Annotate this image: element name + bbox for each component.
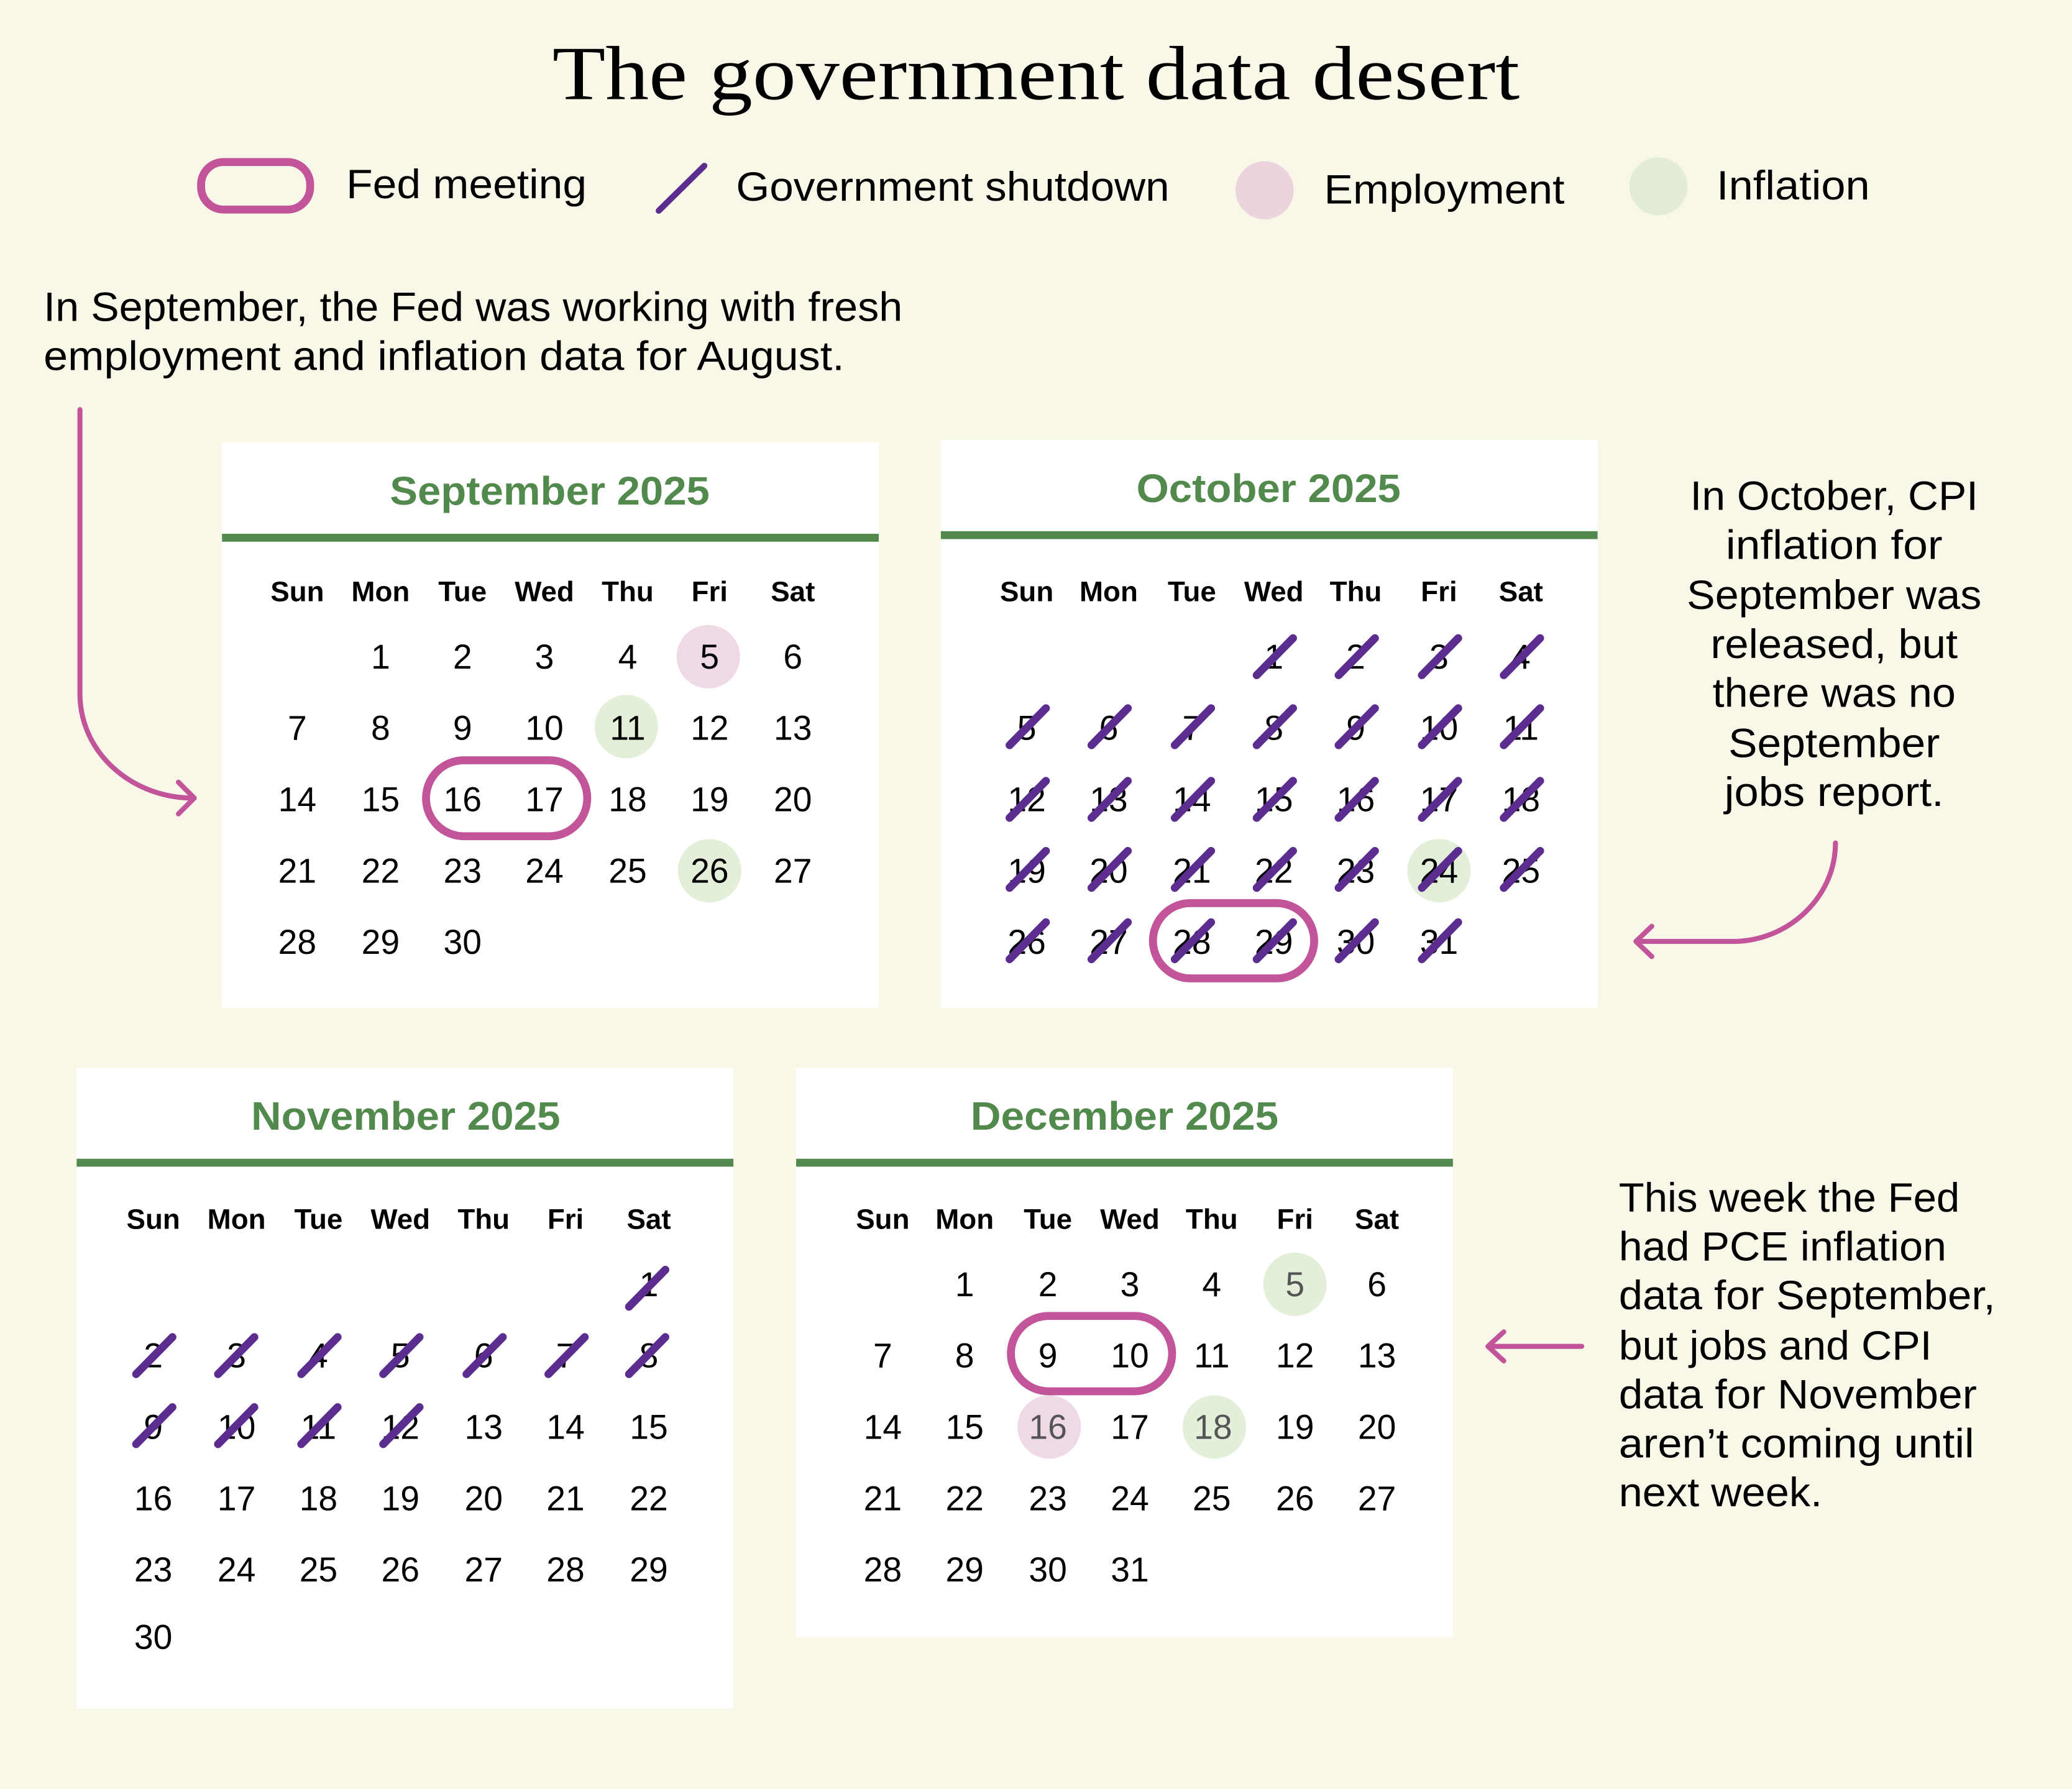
heading: December 2025: December 2025 (971, 1094, 1278, 1138)
dates: 4 (309, 1337, 328, 1375)
dates: 18 (1502, 780, 1540, 819)
dates: 27 (1089, 923, 1128, 961)
dates: 20 (1089, 851, 1128, 890)
weekday header: Fri (548, 1203, 584, 1235)
dates: 8 (371, 709, 390, 748)
dates: 24 (525, 851, 564, 890)
dates: 4 (1202, 1265, 1221, 1304)
dates: 6 (1099, 709, 1118, 748)
dates: 13 (1358, 1337, 1396, 1375)
text: September note: employment and inflation data for August. (44, 332, 845, 378)
dates: 21 (864, 1479, 902, 1517)
weekday header (1000, 575, 1543, 607)
dates: 17 (1111, 1408, 1149, 1447)
dates: 5 (1017, 709, 1036, 748)
dates: 19 (1007, 851, 1046, 890)
weekday header: Thu (1186, 1203, 1238, 1235)
text: October note: released, but (1710, 621, 1958, 667)
legend: Fed meeting: Fed meeting (346, 161, 587, 207)
dates: 30 (134, 1618, 172, 1657)
text: December note: This week the Fed (1619, 1174, 1960, 1220)
dates: 18 (608, 780, 647, 819)
dates: 1 (955, 1265, 974, 1304)
weekday header (856, 1203, 1399, 1235)
arrow: October note to October calendar (1636, 843, 1835, 956)
dates: 11 (301, 1408, 336, 1447)
arrow: December note to December calendar (1488, 1332, 1582, 1361)
weekday header: Sun (856, 1203, 910, 1235)
dates: 6 (1367, 1265, 1387, 1304)
weekday header: Tue (1024, 1203, 1072, 1235)
text: September note (44, 284, 902, 378)
dates: 29 (630, 1550, 668, 1589)
dates: 5 (391, 1337, 410, 1375)
text: December note: aren’t coming until (1619, 1420, 1974, 1466)
weekday header: Wed (515, 575, 574, 607)
weekday header: Sat (626, 1203, 671, 1235)
dates: 9 (1038, 1337, 1058, 1375)
weekday header: Mon (208, 1203, 266, 1235)
weekday header: Tue (294, 1203, 342, 1235)
weekday header: Mon (935, 1203, 994, 1235)
dates: 6 (783, 638, 802, 676)
Fed meeting ring: Dec 9-10 (1011, 1316, 1172, 1391)
panel: December 2025 calendar (796, 1068, 1453, 1637)
dates: 25 (1193, 1479, 1231, 1517)
panel: October 2025 calendar (941, 440, 1598, 1008)
dates: 14 (546, 1408, 585, 1447)
weekday header: Sat (1355, 1203, 1399, 1235)
heading: October 2025: October 2025 (1137, 466, 1401, 511)
weekday header: Sun (126, 1203, 180, 1235)
weekday header: Sat (771, 575, 815, 607)
dates: 12 (1276, 1337, 1314, 1375)
dates: 22 (1255, 851, 1293, 890)
dates: 20 (1358, 1408, 1396, 1447)
dates: 24 (1111, 1479, 1149, 1517)
weekday header: Wed (370, 1203, 430, 1235)
legend: Inflation (1630, 157, 1870, 216)
text: December note: had PCE inflation (1619, 1223, 1946, 1269)
dates: 17 (525, 780, 564, 819)
dates: 24 (1420, 851, 1458, 890)
inflation marker: Dec 5 (1263, 1253, 1327, 1316)
dates: 23 (443, 851, 482, 890)
dates: 24 (218, 1550, 255, 1589)
dates: 7 (1183, 709, 1201, 748)
legend: Fed meeting (201, 161, 587, 209)
dates: 22 (630, 1479, 668, 1517)
dates: 10 (218, 1408, 255, 1447)
dates: 27 (1358, 1479, 1396, 1517)
dates: 8 (1264, 709, 1283, 748)
dates (134, 1265, 668, 1657)
dates: 16 (1029, 1408, 1067, 1447)
dates: 10 (1111, 1337, 1149, 1375)
dates: 5 (1285, 1265, 1304, 1304)
dates: 16 (134, 1479, 172, 1517)
weekday header: Thu (457, 1203, 510, 1235)
dates: 28 (278, 923, 316, 961)
dates (1007, 638, 1540, 961)
legend: Inflation: Inflation (1717, 162, 1870, 208)
employment marker: Sep 5 (677, 625, 740, 689)
dates: 19 (382, 1479, 419, 1517)
dates: 1 (1264, 638, 1283, 676)
text: December note: next week. (1619, 1469, 1822, 1515)
dates: 16 (443, 780, 482, 819)
text: October note (1687, 473, 1981, 815)
dates: 1 (639, 1265, 658, 1304)
text: September note: In September, the Fed was working with fresh (44, 284, 902, 330)
legend (201, 157, 1870, 219)
weekday header: Mon (351, 575, 410, 607)
Fed meeting ring: Sep 16-17 (426, 760, 587, 836)
employment marker: Dec 16 (1017, 1395, 1081, 1458)
panel: November 2025 calendar (76, 1068, 733, 1708)
weekday header: Sun (1000, 575, 1053, 607)
dates: 9 (1346, 709, 1365, 748)
dates: 28 (1173, 923, 1211, 961)
weekday header: Wed (1100, 1203, 1160, 1235)
dates: 15 (1255, 780, 1293, 819)
dates: 27 (464, 1550, 503, 1589)
dates: 10 (1420, 709, 1458, 748)
dates: 27 (774, 851, 812, 890)
dates: 29 (945, 1550, 984, 1589)
dates: 15 (362, 780, 400, 819)
text: October note: inflation for (1726, 521, 1943, 567)
dates: 18 (300, 1479, 337, 1517)
heading: November 2025: November 2025 (251, 1094, 561, 1138)
dates: 2 (1346, 638, 1365, 676)
dates: 21 (546, 1479, 585, 1517)
dates: 14 (278, 780, 316, 819)
dates: 28 (546, 1550, 585, 1589)
legend: Employment (1235, 161, 1565, 219)
dates: 13 (1089, 780, 1128, 819)
dates: 23 (134, 1550, 172, 1589)
weekday header: Fri (692, 575, 728, 607)
dates: 2 (144, 1337, 163, 1375)
dates: 4 (1511, 638, 1531, 676)
shutdown slashes: Nov 1-12 (136, 1270, 666, 1444)
dates: 26 (382, 1550, 419, 1589)
dates: 18 (1194, 1408, 1232, 1447)
dates: 23 (1337, 851, 1375, 890)
dates: 14 (1173, 780, 1211, 819)
Fed meeting ring: Oct 28-29 (1153, 903, 1314, 979)
shutdown slashes: Oct 1-31 (1009, 638, 1540, 959)
weekday header (126, 1203, 671, 1235)
arrow: September note to September calendar (80, 410, 195, 814)
dates: 29 (362, 923, 400, 961)
dates: 13 (464, 1408, 503, 1447)
dates: 28 (864, 1550, 902, 1589)
dates: 12 (1007, 780, 1046, 819)
dates: 26 (1007, 923, 1046, 961)
weekday header: Sat (1499, 575, 1543, 607)
dates: 26 (690, 851, 729, 890)
text: October note: September was (1687, 572, 1981, 618)
dates: 7 (873, 1337, 892, 1375)
dates: 21 (1173, 851, 1211, 890)
dates (278, 638, 812, 961)
dates: 25 (1502, 851, 1540, 890)
dates: 15 (945, 1408, 984, 1447)
dates: 16 (1337, 780, 1375, 819)
dates: 12 (382, 1408, 419, 1447)
dates: 31 (1420, 923, 1458, 961)
weekday header (270, 575, 815, 607)
dates: 22 (362, 851, 400, 890)
dates: 4 (618, 638, 637, 676)
dates: 17 (218, 1479, 255, 1517)
inflation marker: Sep 11 (595, 695, 658, 758)
dates: 5 (700, 638, 719, 676)
weekday header: Fri (1421, 575, 1457, 607)
weekday header: Tue (1168, 575, 1216, 607)
dates: 25 (608, 851, 647, 890)
text: October note: jobs report. (1723, 769, 1944, 815)
dates: 8 (639, 1337, 658, 1375)
heading: September 2025: September 2025 (390, 469, 710, 513)
weekday header: Wed (1244, 575, 1304, 607)
dates: 11 (1503, 709, 1539, 748)
dates: 19 (1276, 1408, 1314, 1447)
dates: 25 (300, 1550, 337, 1589)
dates: 14 (864, 1408, 902, 1447)
dates: 2 (1038, 1265, 1058, 1304)
dates (864, 1265, 1396, 1589)
dates: 23 (1029, 1479, 1067, 1517)
text: December note: but jobs and CPI (1619, 1322, 1932, 1368)
dates: 8 (955, 1337, 974, 1375)
dates: 12 (690, 709, 729, 748)
dates: 10 (525, 709, 564, 748)
dates: 3 (1429, 638, 1449, 676)
dates: 26 (1276, 1479, 1314, 1517)
panel: September 2025 calendar (222, 442, 879, 1008)
dates: 6 (474, 1337, 493, 1375)
inflation marker: Oct 24 (1407, 839, 1471, 902)
inflation marker: Sep 26 (678, 839, 741, 902)
text: October note: there was no (1713, 670, 1956, 716)
dates: 11 (610, 709, 646, 748)
dates: 20 (774, 780, 812, 819)
dates: 2 (453, 638, 472, 676)
dates: 9 (453, 709, 472, 748)
dates: 15 (630, 1408, 668, 1447)
weekday header: Thu (602, 575, 654, 607)
dates: 7 (288, 709, 307, 748)
dates: 13 (774, 709, 812, 748)
dates: 31 (1111, 1550, 1149, 1589)
weekday header: Tue (438, 575, 487, 607)
legend: Government shutdown: Government shutdown (736, 163, 1170, 209)
dates: 7 (556, 1337, 575, 1375)
weekday header: Mon (1080, 575, 1138, 607)
text: December note: data for November (1619, 1371, 1977, 1417)
dates: 30 (1337, 923, 1375, 961)
dates: 3 (535, 638, 554, 676)
weekday header: Thu (1330, 575, 1382, 607)
dates: 19 (690, 780, 729, 819)
dates: 21 (278, 851, 316, 890)
text: December note: data for September, (1619, 1272, 1996, 1318)
text: October note: In October, CPI (1690, 473, 1978, 519)
text: October note: September (1728, 720, 1940, 766)
dates: 3 (227, 1337, 246, 1375)
dates: 11 (1194, 1337, 1229, 1375)
dates: 9 (144, 1408, 163, 1447)
weekday header: Fri (1277, 1203, 1313, 1235)
text: December note (1619, 1174, 1996, 1515)
weekday header: Sun (270, 575, 324, 607)
title: The government data desert (552, 30, 1520, 116)
dates: 17 (1420, 780, 1458, 819)
inflation marker: Dec 18 (1183, 1395, 1246, 1458)
dates: 20 (464, 1479, 503, 1517)
dates: 3 (1121, 1265, 1139, 1304)
dates: 29 (1255, 923, 1293, 961)
dates: 1 (371, 638, 390, 676)
dates: 30 (1029, 1550, 1067, 1589)
legend: Employment: Employment (1324, 166, 1565, 212)
dates: 22 (945, 1479, 984, 1517)
dates: 30 (443, 923, 482, 961)
